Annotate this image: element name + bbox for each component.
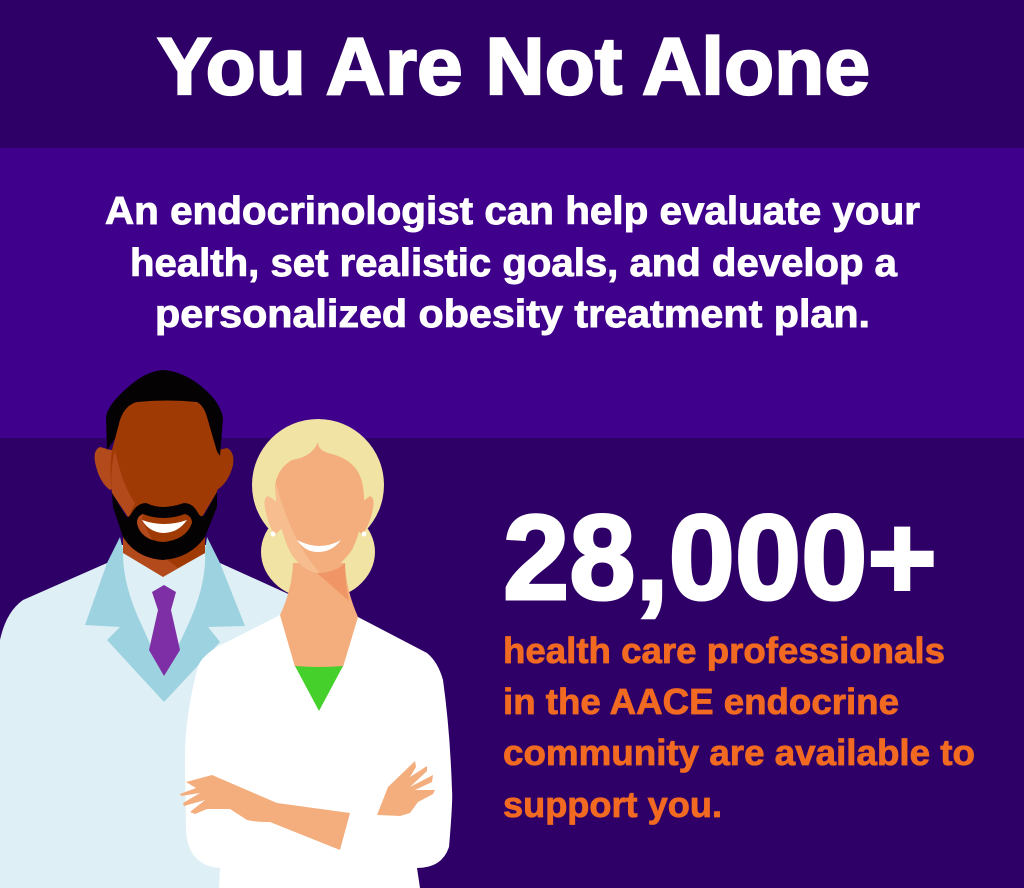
panel: intro band [0,148,1024,438]
intro text: An endocrinologist can help evaluate your [105,190,920,233]
coat [185,615,452,888]
statistic number: 28,000+ [503,489,937,625]
title: You Are Not Alone [157,22,870,112]
neck shadow [317,563,349,601]
panel: title band [0,0,1024,148]
statistic caption: in the AACE endocrine [503,681,899,722]
shirt [119,545,208,690]
mouth [137,514,192,542]
ears [95,447,125,490]
beard [112,492,217,560]
lapels [85,537,245,702]
smile [297,540,341,552]
neck [123,530,205,577]
statistic caption: community are available to [503,732,975,773]
intro text: health, set realistic goals, and develop a [130,242,897,285]
hair [106,370,223,456]
neck [280,563,358,667]
illustration: male doctor [0,370,300,888]
green top [295,666,343,711]
face highlight [275,482,320,573]
earrings [270,532,276,536]
illustration: female doctor [180,419,452,888]
intro text: personalized obesity treatment plan. [155,293,870,336]
tie [149,585,180,676]
mouth shade [137,514,152,540]
left forearm and hand [180,775,350,850]
ears [264,496,290,535]
face [275,442,364,573]
hair crown [252,419,384,551]
statistic caption: health care professionals [503,630,945,671]
panel: statistic band [0,438,1024,888]
coat [0,563,300,888]
face [110,400,218,535]
face side shade [111,450,135,517]
teeth [142,520,187,533]
statistic caption [503,630,975,825]
right hand [377,761,435,816]
neck shadow [165,535,205,568]
intro text [105,190,920,336]
statistic caption: support you. [503,784,722,825]
hair bun [261,504,375,600]
